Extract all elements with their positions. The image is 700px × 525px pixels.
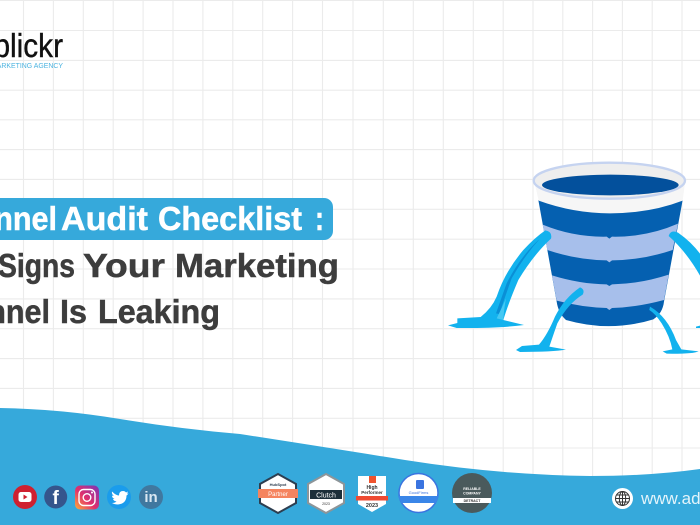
footer wave — [0, 408, 700, 525]
badge: goodfirms — [398, 474, 439, 512]
social icons — [13, 485, 163, 510]
icon: linkedin: in — [144, 489, 158, 506]
icon: twitter — [107, 485, 131, 509]
award badges — [258, 473, 492, 513]
title line 1: Audit — [61, 200, 148, 237]
badge: reliable company: DETRACT — [464, 499, 481, 503]
bucket body — [538, 200, 683, 326]
title — [0, 198, 339, 330]
small right water stream — [649, 307, 699, 354]
title line 2: Signs — [0, 247, 75, 284]
title highlight pill — [0, 198, 333, 240]
title line 2: Marketing — [175, 247, 339, 284]
icon: globe — [612, 488, 633, 509]
icon: facebook — [44, 486, 67, 509]
title line 3 — [0, 293, 220, 330]
badge: goodfirms: GoodFirms — [409, 490, 428, 495]
right puddle fragment — [696, 325, 700, 328]
bucket white band — [534, 180, 685, 213]
bucket light stripe lower — [552, 275, 669, 310]
title line 3: Leaking — [98, 293, 220, 330]
title line 1: Checklist — [158, 200, 302, 237]
title line 1 — [0, 200, 324, 237]
bucket inside — [542, 175, 679, 195]
badge: reliable company — [452, 473, 492, 513]
badge: clutch: Clutch — [316, 492, 336, 500]
icon: linkedin — [139, 485, 163, 509]
badge: g2 high performer: High — [366, 485, 378, 491]
icon: facebook: f — [53, 488, 60, 509]
badge: reliable company: COMPANY — [463, 492, 481, 496]
badge: g2 high performer: Performer — [361, 490, 383, 495]
badge: hubspot partner: Partner — [268, 492, 288, 498]
icon: instagram — [75, 486, 99, 510]
leaking bucket illustration — [448, 163, 700, 354]
large left water stream — [448, 230, 551, 328]
badge: g2 high performer — [356, 476, 388, 512]
badge: hubspot partner: HubSpot — [270, 482, 287, 487]
bucket light stripe upper — [543, 224, 678, 262]
title line 2: Your — [83, 247, 165, 284]
badge: clutch — [308, 474, 344, 513]
right water stream — [669, 232, 700, 282]
title line 2 — [0, 247, 339, 284]
badge: reliable company: RELIABLE — [463, 487, 481, 491]
badge: g2 high performer: 2023 — [366, 503, 378, 509]
title line 3: Is — [60, 293, 87, 330]
badge: clutch: 2023 — [322, 502, 330, 506]
badge: hubspot partner — [258, 474, 298, 513]
icon: youtube — [13, 485, 37, 509]
bucket rim — [534, 163, 685, 199]
small centre water stream — [516, 287, 584, 352]
title line 1: : — [315, 200, 324, 237]
